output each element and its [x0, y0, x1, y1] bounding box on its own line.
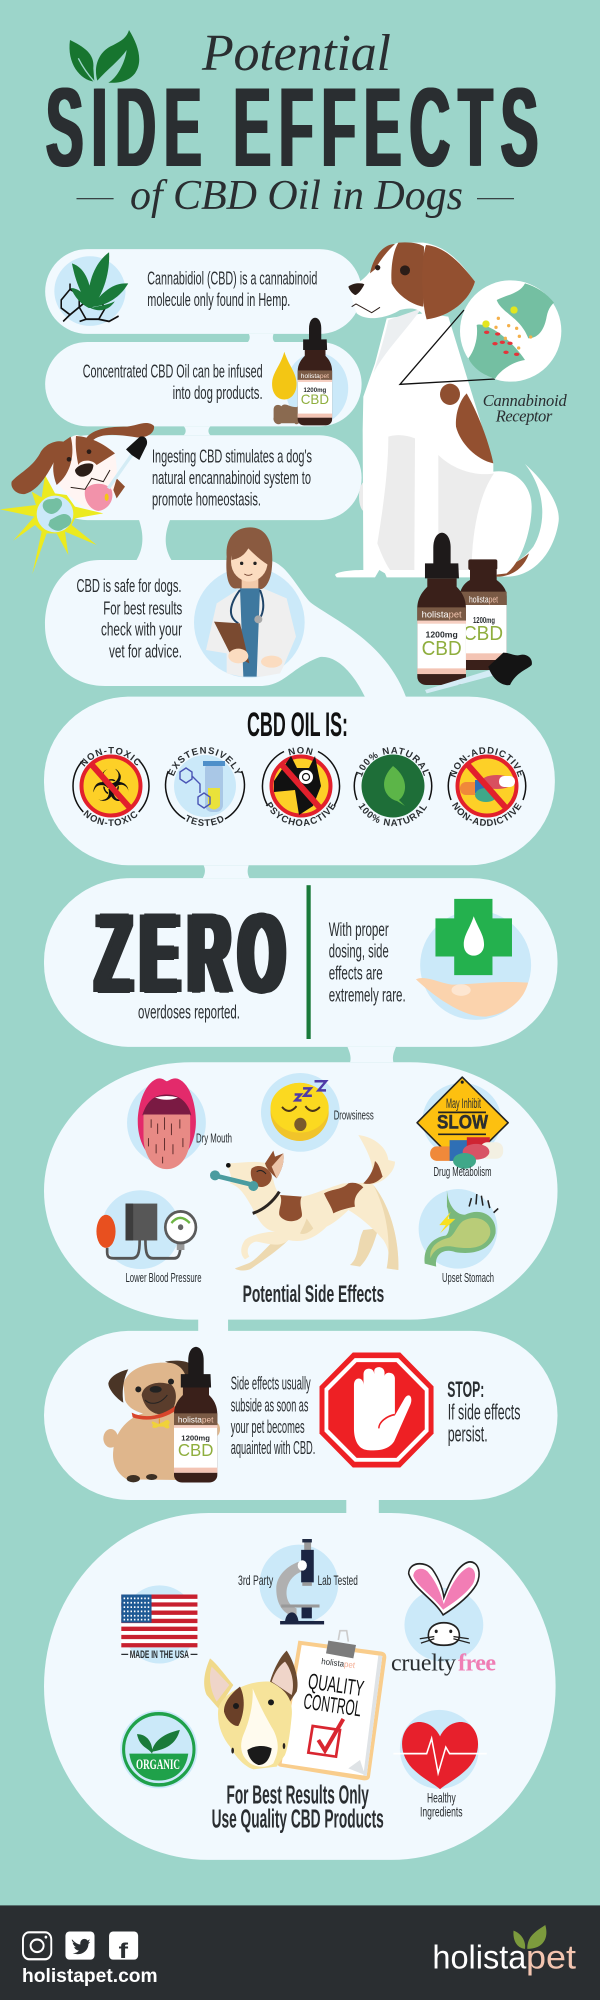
icon: leaves — [69, 30, 139, 83]
icon: dry mouth — [127, 1078, 206, 1169]
illustration: CBD bottles and dropper — [417, 533, 532, 693]
illustration: sitting dog — [335, 242, 559, 577]
callout: cannabinoid receptor: Cannabinoid — [483, 391, 567, 410]
text: stop — [447, 1377, 520, 1446]
text: side effects subside: Side effects usually — [231, 1373, 311, 1393]
panel: stop — [44, 1303, 558, 1500]
heading — [212, 1782, 384, 1833]
icon: slow sign and pills: SLOW — [437, 1112, 488, 1134]
text: pill 2: Concentrated CBD Oil can be infused — [83, 362, 263, 382]
label: Upset Stomach — [442, 1270, 494, 1285]
bottle 1: CBD — [301, 391, 329, 407]
title block — [69, 25, 514, 219]
label: Ingredients — [420, 1804, 463, 1820]
logo: holistapet — [432, 1925, 576, 1975]
icon: cruelty free bunny: cruelty — [391, 1650, 456, 1676]
back bottle: CBD — [463, 623, 503, 645]
callout: cannabinoid receptor: Receptor — [495, 407, 553, 426]
text: side effects subside — [231, 1373, 315, 1458]
icon: quality control clipboard and dog: CONTROL — [302, 1688, 363, 1721]
icon: made in the USA flag — [121, 1585, 197, 1663]
pill shapes — [45, 249, 406, 697]
text: dosing: effects are — [329, 964, 383, 985]
label — [420, 1790, 463, 1820]
footer — [0, 1905, 600, 2000]
icon: hemp leaf and molecule — [54, 252, 128, 326]
bottle 3: holistapet — [178, 1415, 214, 1425]
badge: 100% natural — [354, 747, 432, 826]
badge: extensively tested: TESTED — [186, 814, 224, 826]
text: stop: persist. — [448, 1421, 488, 1446]
badge: 100% natural: 100% NATURAL — [356, 747, 429, 777]
badge: non-addictive: NON-ADDICTIVE — [450, 746, 524, 778]
text: pill 4: check with your — [101, 620, 182, 640]
icon: upset stomach — [419, 1189, 498, 1269]
label: Lab Tested — [318, 1572, 358, 1588]
badge: extensively tested: EXSTENSIVELY — [168, 747, 242, 776]
icon: hand and medical cross — [416, 899, 531, 1020]
icon: slow sign and pills — [417, 1077, 508, 1169]
back bottle: 1200mg — [473, 616, 495, 625]
text: pill 1 — [147, 268, 317, 310]
text: pill 3: Ingesting CBD stimulates a dog's — [152, 446, 312, 466]
text: side effects subside: subside as soon as — [231, 1396, 308, 1416]
caption: overdoses reported. — [138, 1003, 240, 1024]
icon: instagram — [23, 1932, 51, 1959]
text: pill 4: vet for advice. — [109, 642, 182, 662]
illustration: licking dog with dropper — [0, 423, 154, 574]
icon: cruelty free bunny — [391, 1562, 496, 1676]
icon: stop sign — [320, 1353, 434, 1467]
text: pill 3: natural encannabinoid system to — [152, 468, 311, 488]
panel: CBD oil is — [44, 696, 555, 866]
title line 1: Potential — [201, 25, 391, 82]
text: pill 4 — [76, 576, 182, 662]
text: pill 3 — [152, 446, 312, 509]
text: dosing — [329, 920, 406, 1007]
front bottle — [417, 533, 466, 685]
front bottle: CBD — [422, 638, 462, 660]
badge: non-toxic: NON-TOXIC — [83, 810, 138, 826]
icon: facebook — [109, 1931, 138, 1963]
panel: intro pills — [45, 249, 406, 697]
text: dosing: With proper — [329, 920, 389, 941]
icon: quality control clipboard and dog: QUALITY — [307, 1668, 366, 1701]
big word: zero: ZERO — [96, 891, 293, 1016]
logo: holistapet: pet — [526, 1938, 576, 1975]
icon: organic seal: ORGANIC — [136, 1757, 180, 1773]
bottle 1: holistapet — [301, 373, 329, 380]
label: Drug Metabolism — [434, 1164, 492, 1179]
badge: non-addictive — [448, 746, 526, 826]
bottle 1 — [298, 318, 332, 425]
icon: facebook: f — [118, 1940, 129, 1963]
badge: non-toxic: NON-TOXIC — [80, 747, 141, 767]
icon: slow sign and pills: May Inhibit — [446, 1095, 481, 1111]
icon: blood pressure — [96, 1190, 196, 1269]
dropper — [425, 653, 532, 693]
title line 3: of CBD Oil in Dogs — [130, 173, 463, 219]
website: holistapet.com — [22, 1966, 158, 1987]
icon: quality control clipboard and dog — [204, 1631, 386, 1780]
icon: oil drop, bone and bottle — [272, 318, 348, 425]
front bottle: holistapet — [422, 610, 462, 620]
illustration: pug with bottle — [103, 1347, 220, 1482]
badge: extensively tested — [164, 747, 246, 826]
badge: non psychoactive: NON — [288, 747, 313, 756]
panel: potential side effects — [44, 1047, 558, 1320]
text: stop: If side effects — [448, 1400, 520, 1425]
panel: quality products — [44, 1498, 556, 1860]
text: pill 1: molecule only found in Hemp. — [147, 290, 290, 310]
bottle 3: CBD — [178, 1440, 213, 1460]
front bottle: 1200mg — [426, 630, 458, 640]
callout: cannabinoid receptor — [400, 280, 567, 426]
icon: microscope — [238, 1539, 358, 1624]
text: side effects subside: aquainted with CBD. — [231, 1438, 315, 1458]
panel: zero overdoses — [44, 865, 558, 1047]
title line 2: SIDE EFFECTS — [46, 65, 546, 190]
text: pill 4: For best results — [103, 598, 182, 618]
text: dosing: extremely rare. — [329, 986, 406, 1007]
badge: non psychoactive — [262, 747, 340, 826]
text: side effects subside: your pet becomes — [231, 1417, 305, 1437]
bottle 3 — [174, 1347, 217, 1482]
bottle 1: 1200mg — [304, 387, 327, 394]
badge: non-addictive: NON-ADDICTIVE — [452, 802, 522, 826]
illustration: veterinarian — [194, 527, 305, 678]
icon: organic seal — [120, 1710, 197, 1788]
text: pill 2: into dog products. — [173, 383, 263, 403]
label: Drowsiness — [334, 1107, 374, 1122]
icon: twitter — [65, 1931, 95, 1960]
label: Healthy — [427, 1790, 456, 1806]
text: pill 3: promote homeostasis. — [152, 489, 261, 509]
text: pill 2 — [83, 362, 263, 403]
heading: Use Quality CBD Products — [212, 1805, 384, 1833]
text: dosing: dosing, side — [329, 942, 389, 963]
label: Lower Blood Pressure — [126, 1270, 202, 1285]
icon: cruelty free bunny: free — [458, 1650, 496, 1676]
text: stop: STOP: — [447, 1377, 484, 1402]
text: pill 1: Cannabidiol (CBD) is a cannabinoid — [147, 268, 317, 288]
back bottle — [459, 559, 507, 670]
back bottle: holistapet — [469, 595, 498, 605]
illustration: running dog — [210, 1135, 398, 1270]
badge: non psychoactive: PSYCHOACTIVE — [266, 802, 336, 826]
bottle 3: 1200mg — [181, 1433, 210, 1442]
heading: CBD OIL IS: — [247, 706, 348, 744]
heading: For Best Results Only — [226, 1782, 369, 1810]
icon: made in the USA flag: MADE IN THE USA — [130, 1649, 189, 1661]
label: 3rd Party — [238, 1572, 273, 1588]
icon: heart — [393, 1710, 487, 1789]
heading: Potential Side Effects — [243, 1281, 384, 1308]
label: Dry Mouth — [196, 1131, 232, 1146]
badge: non-toxic: ☣ — [91, 761, 131, 812]
badge: non-toxic — [72, 747, 150, 826]
logo: holistapet: holista — [432, 1938, 527, 1975]
icon: drowsiness — [261, 1073, 340, 1152]
text: pill 4: CBD is safe for dogs. — [76, 576, 182, 596]
badge: 100% natural: 100% NATURAL — [358, 803, 428, 826]
icon: quality control clipboard and dog: holistapet — [321, 1656, 356, 1670]
